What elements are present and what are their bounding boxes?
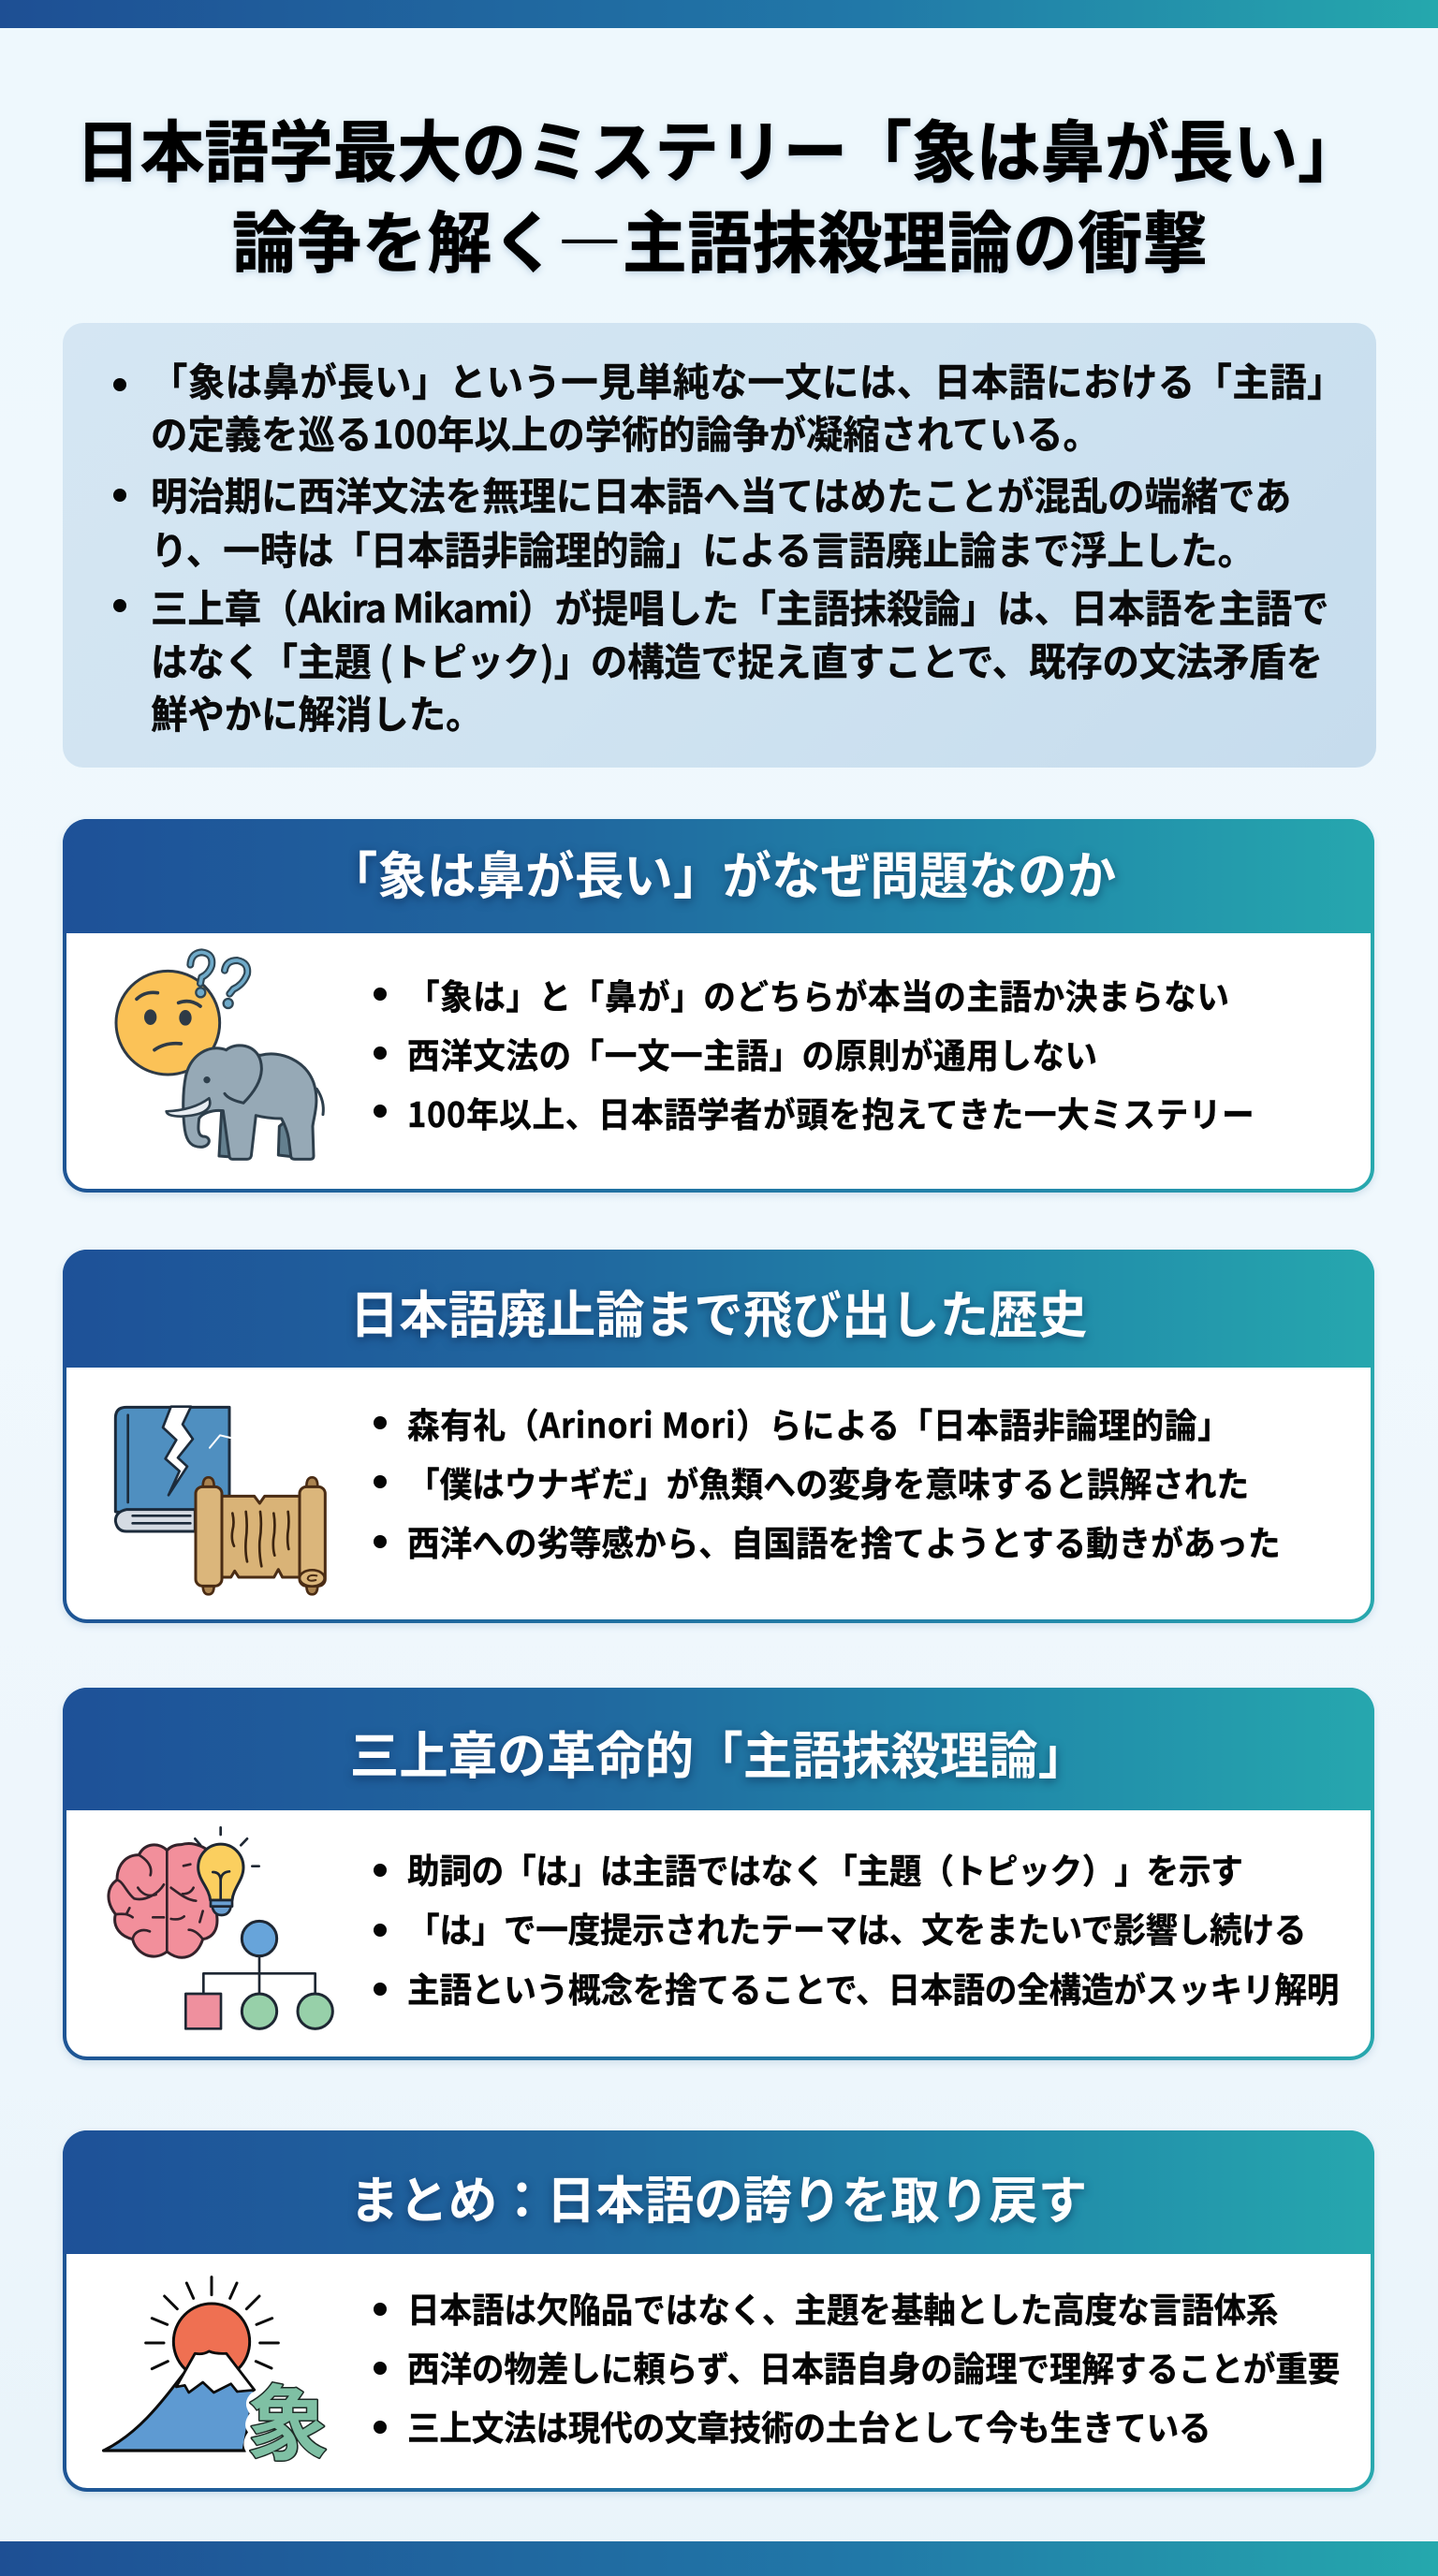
summary bullet 1 text	[113, 352, 1344, 460]
heading: card 4: まとめ：日本語の誇りを取り戻す	[350, 2159, 1087, 2234]
card 4 bullet list: 日本語は欠陥品ではなく、主題を基軸とした高度な言語体系	[407, 2282, 1278, 2333]
icon: brain, light bulb and tree diagram	[107, 1826, 334, 2030]
top gradient bar	[0, 0, 1438, 28]
summary bullet 1 text: 「象は鼻が長い」という一見単純な一文には、日本語における「主語」	[151, 352, 1344, 407]
bottom gradient bar	[0, 2541, 1438, 2576]
summary bullet 2 text	[113, 466, 1291, 576]
panel: summary	[63, 323, 1376, 768]
card 3 bullet list	[374, 1844, 1339, 2012]
heading: card 1: 「象は鼻が長い」がなぜ問題なのか	[329, 835, 1116, 910]
card 3 bullet list: 主語という概念を捨てることで、日本語の全構造がスッキリ解明	[407, 1962, 1339, 2012]
summary bullet 1 text: の定義を巡る100年以上の学術的論争が凝縮されている。	[151, 404, 1100, 460]
title: 日本語学最大のミステリー「象は鼻が長い」	[76, 98, 1362, 196]
summary bullet 3 text	[113, 578, 1329, 739]
card 3 bullet list: 「は」で一度提示されたテーマは、文をまたいで影響し続ける	[407, 1902, 1306, 1953]
panel: card 3 Mikami's theory	[63, 1688, 1374, 2060]
panel: card 1 why it is a problem	[63, 819, 1374, 1193]
card 4 bullet list: 三上文法は現代の文章技術の土台として今も生きている	[407, 2400, 1211, 2451]
card 1 bullet list: 100年以上、日本語学者が頭を抱えてきた一大ミステリー	[407, 1088, 1255, 1136]
heading: card 2	[63, 1250, 1374, 1368]
summary bullet 2 text: り、一時は「日本語非論理的論」による言語廃止論まで浮上した。	[151, 520, 1255, 576]
summary bullet 3 text: 鮮やかに解消した。	[151, 684, 483, 739]
card 1 bullet list	[374, 970, 1255, 1136]
icon: Mount Fuji sunrise with kanji: 象	[247, 2358, 329, 2476]
card 4 bullet list: 西洋の物差しに頼らず、日本語自身の論理で理解することが重要	[407, 2342, 1340, 2391]
heading: card 2: 日本語廃止論まで飛び出した歴史	[350, 1274, 1087, 1349]
card 1 bullet list: 「象は」と「鼻が」のどちらが本当の主語か決まらない	[407, 970, 1229, 1018]
icon: cracked book and scroll	[114, 1405, 327, 1596]
panel: card 2 abolition history	[63, 1250, 1374, 1623]
card 2 bullet list: 「僕はウナギだ」が魚類への変身を意味すると誤解された	[407, 1456, 1249, 1507]
card 2 bullet list: 森有礼（Arinori Mori）らによる「日本語非論理的論」	[407, 1398, 1230, 1447]
card 1 bullet list: 西洋文法の「一文一主語」の原則が通用しない	[407, 1028, 1098, 1078]
summary bullet 3 text: はなく「主題 (トピック)」の構造で捉え直すことで、既存の文法矛盾を	[151, 632, 1323, 687]
card 4 bullet list	[374, 2282, 1340, 2451]
card 2 bullet list: 西洋への劣等感から、自国語を捨てようとする動きがあった	[407, 1516, 1281, 1565]
title	[76, 98, 1362, 286]
summary bullet 2 text: 明治期に西洋文法を無理に日本語へ当てはめたことが混乱の端緒であ	[151, 466, 1291, 521]
heading: card 1	[63, 819, 1374, 933]
panel: card 4 conclusion	[63, 2130, 1374, 2492]
card 3 bullet list: 助詞の「は」は主語ではなく「主題（トピック）」を示す	[407, 1844, 1243, 1893]
summary bullet 3 text: 三上章（Akira Mikami）が提唱した「主語抹殺論」は、日本語を主語で	[151, 578, 1329, 634]
heading: card 3: 三上章の革命的「主語抹殺理論」	[350, 1715, 1087, 1790]
icon: confused face and elephant	[114, 948, 325, 1161]
heading: card 3	[63, 1688, 1374, 1810]
title: 論争を解く―主語抹殺理論の衝撃	[232, 189, 1208, 286]
card 2 bullet list	[374, 1398, 1281, 1565]
heading: card 4	[63, 2130, 1374, 2254]
icon: Mount Fuji sunrise with kanji	[102, 2276, 329, 2476]
